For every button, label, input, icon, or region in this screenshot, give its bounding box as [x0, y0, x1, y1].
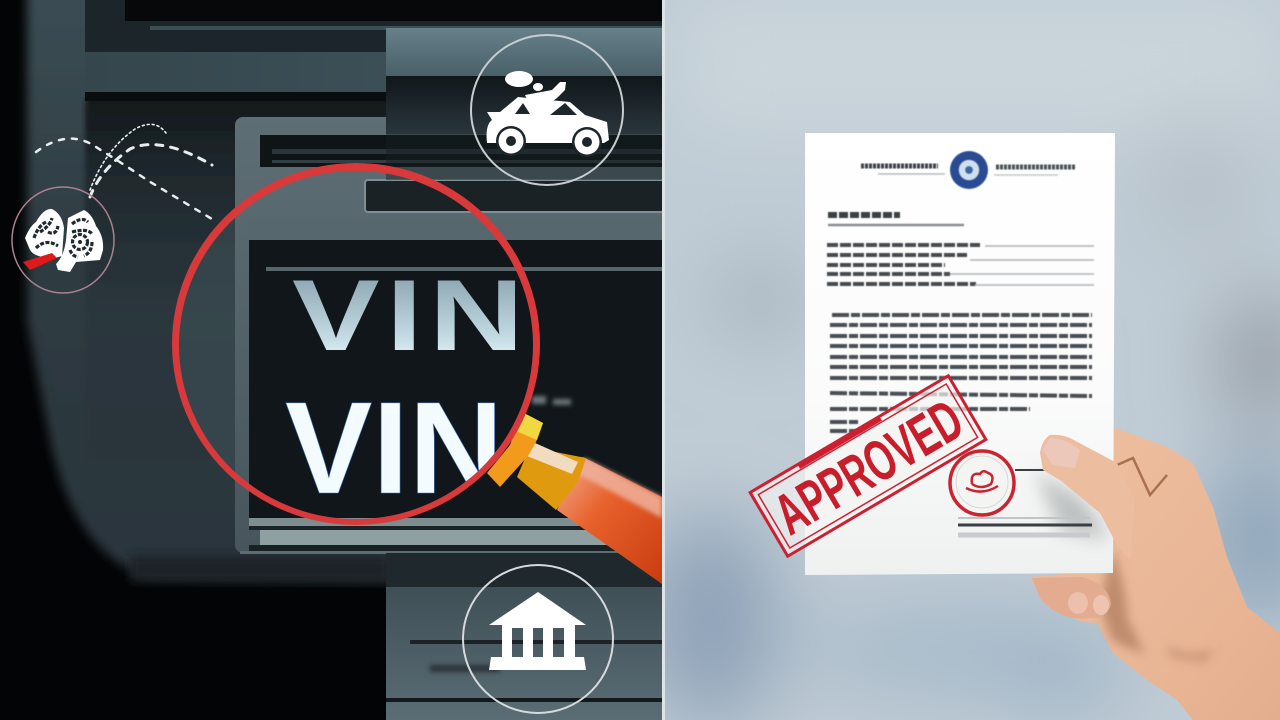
dashboard recess	[82, 98, 386, 282]
chrome frame	[235, 117, 665, 553]
thumb shadow	[1035, 470, 1110, 540]
magnifier handle	[557, 457, 662, 584]
approved stamp: APPROVED	[764, 387, 974, 548]
panel: blurred background	[640, 0, 1280, 720]
magnifier ferrule	[517, 447, 586, 510]
dashboard body	[21, 0, 386, 586]
icon: car with person in circle	[471, 35, 623, 185]
icon: magnifying glass	[172, 163, 662, 584]
glass highlight on left of frame	[179, 218, 235, 472]
icon: thumb over paper	[1040, 434, 1123, 551]
magnifier collar	[487, 412, 543, 487]
document body paragraph	[830, 315, 1092, 431]
signature lines	[958, 470, 1092, 535]
text: lower VIN: VIN	[285, 374, 503, 521]
hand shading	[1100, 550, 1215, 662]
text: upper VIN: VIN	[292, 259, 530, 372]
document header	[861, 151, 1075, 189]
lower dash shadow	[130, 556, 390, 582]
icon: bank building in circle	[463, 565, 613, 713]
round red seal	[950, 451, 1014, 515]
magnifier ring	[172, 163, 540, 525]
icon: brain in circle	[12, 187, 114, 293]
panel: car dashboard with VIN	[0, 0, 672, 720]
panel: approved document	[750, 133, 1115, 575]
dashed route lines	[36, 124, 217, 222]
panel: lighter overlay strip	[386, 28, 663, 720]
icon: hand behind paper	[1030, 426, 1280, 720]
crease lines	[1117, 458, 1167, 495]
document title	[828, 215, 964, 225]
fingers	[1032, 577, 1111, 619]
approved stamp	[750, 376, 986, 556]
faint screen marks	[532, 396, 571, 405]
document field rows	[827, 245, 1094, 285]
